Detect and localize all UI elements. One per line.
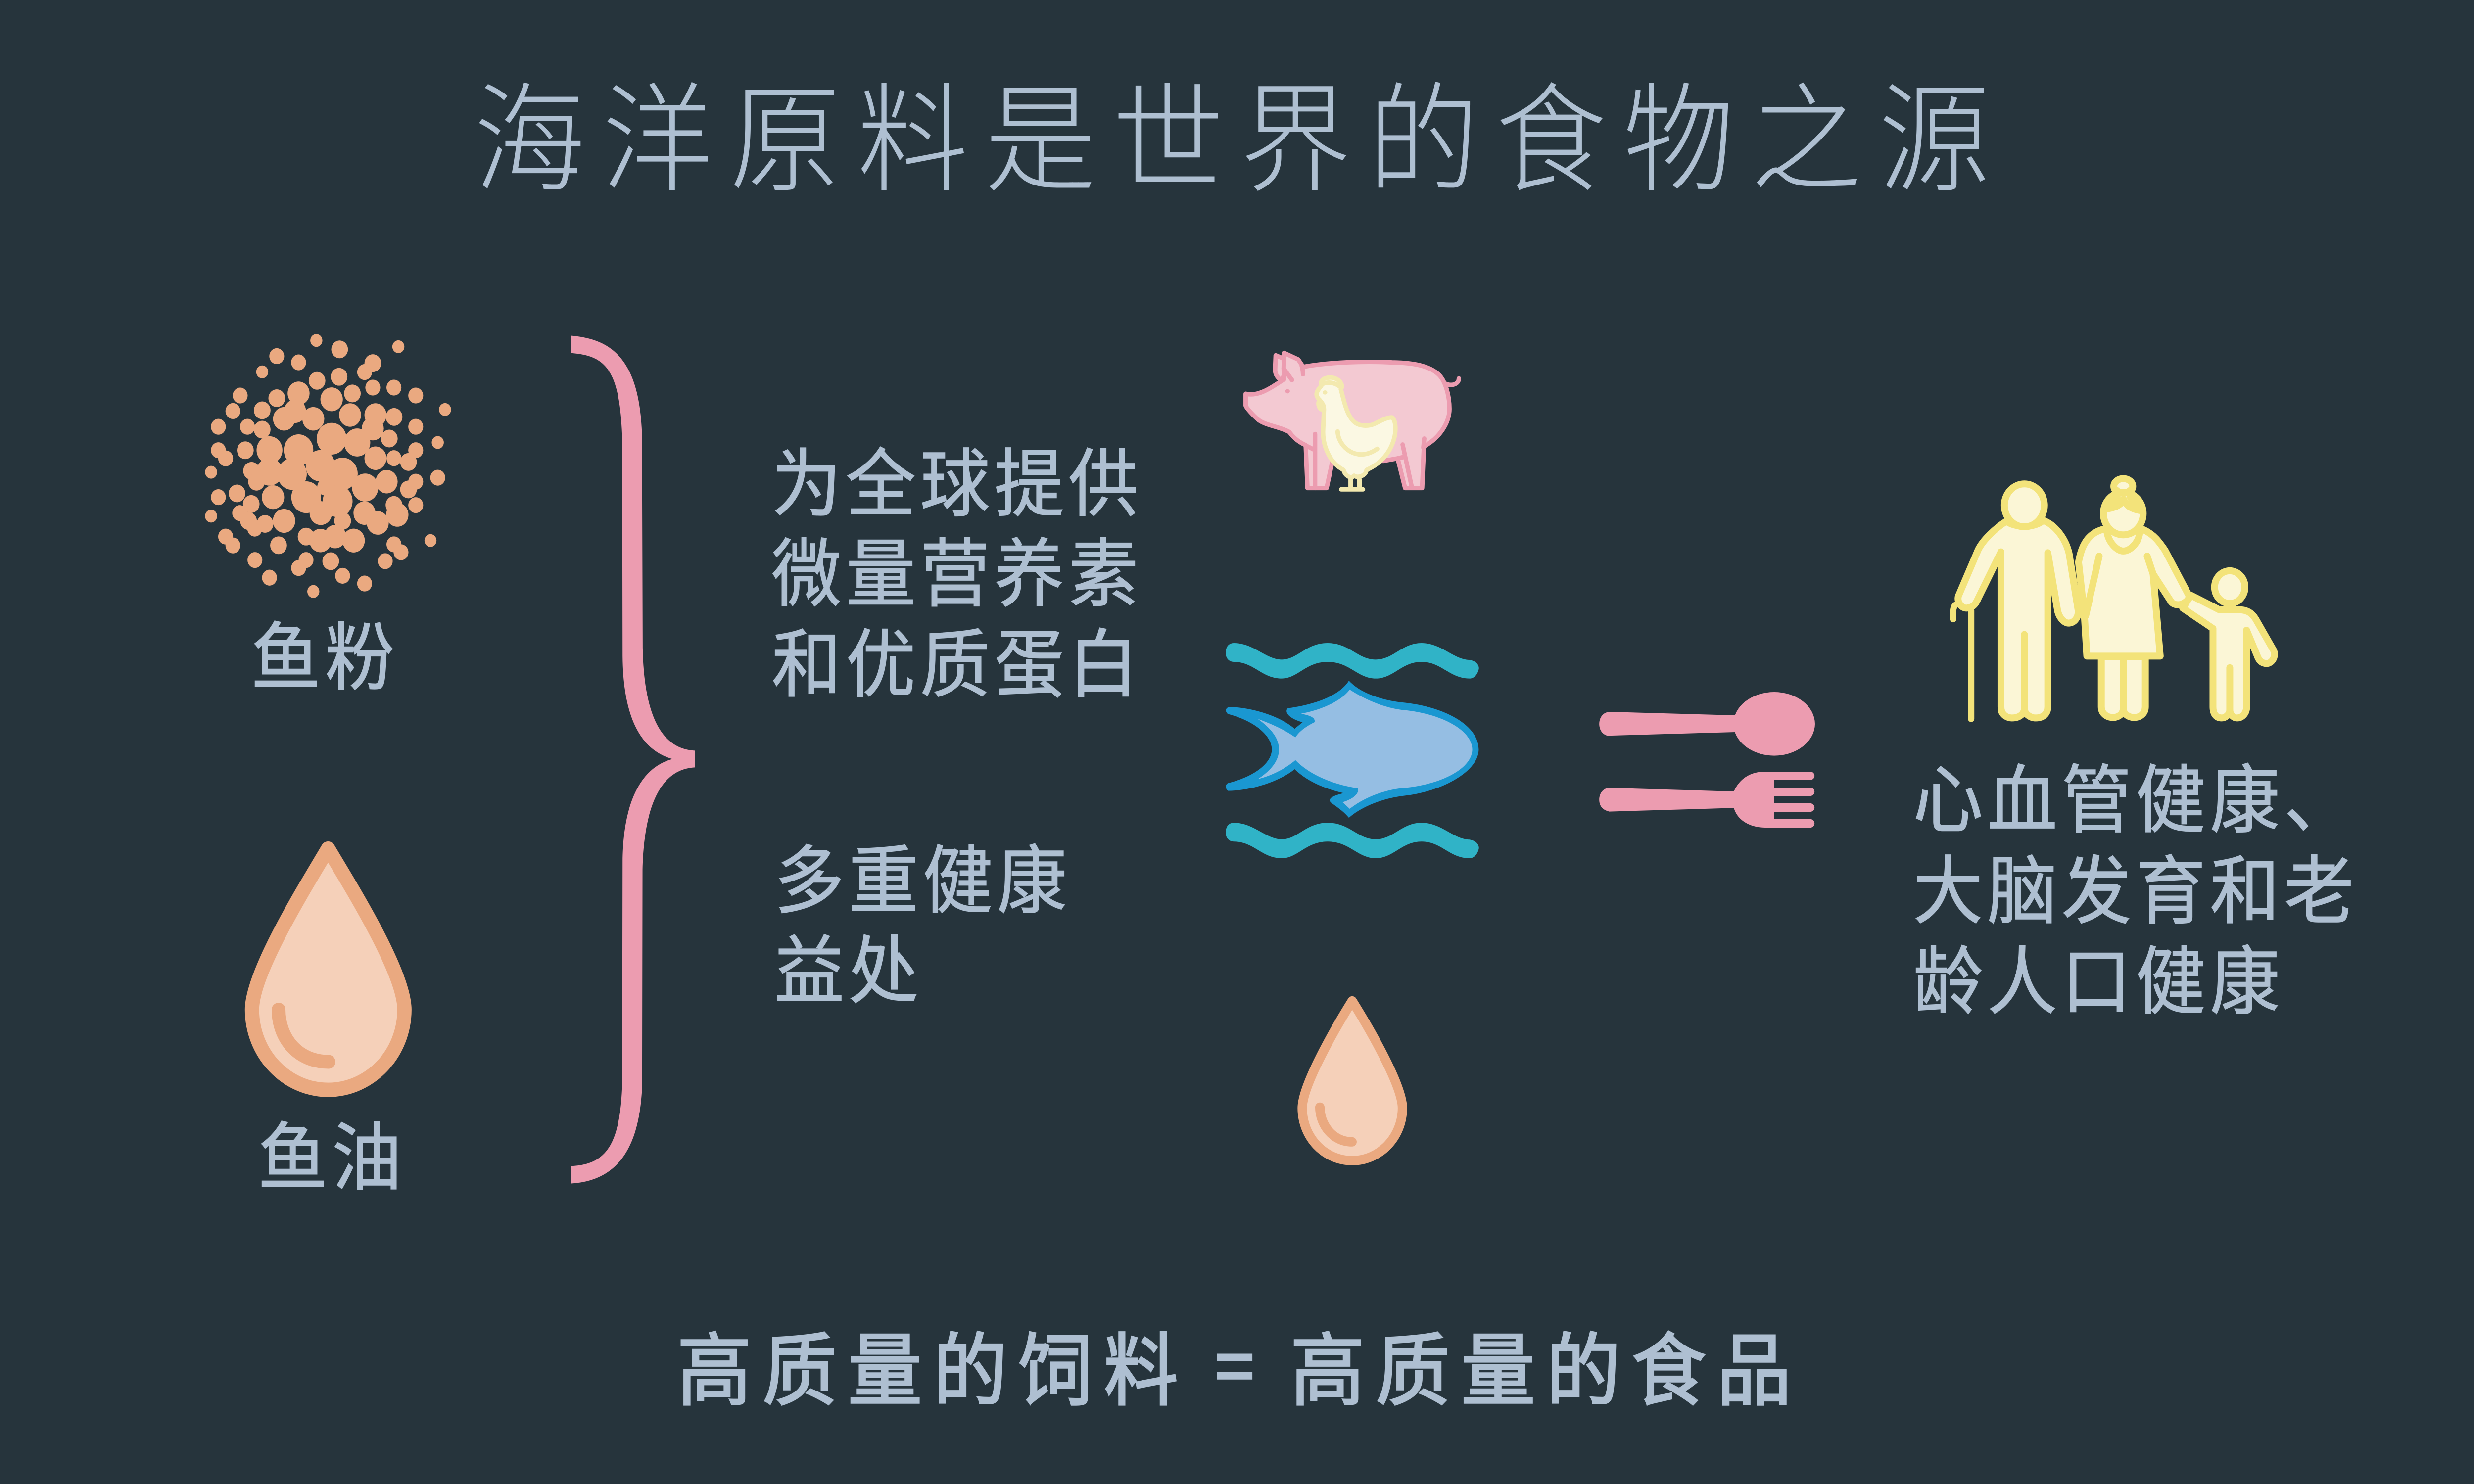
text block: health outcomes: 龄人口健康: [1913, 940, 2284, 1023]
icon: pig and chicken: [1246, 353, 1459, 489]
text block: health benefits: 益处: [774, 929, 923, 1013]
text block: health benefits: [774, 839, 1071, 1013]
icon: fish oil drop: [252, 849, 404, 1090]
wave: top: [1226, 643, 1479, 679]
text block: health benefits: 多重健康: [774, 839, 1071, 923]
title: 海洋原料是世界的食物之源: [474, 74, 2006, 207]
grandfather: [1953, 484, 2078, 719]
brace: [571, 336, 695, 1183]
spoon: [1599, 692, 1815, 756]
icon: small fish oil drop: [1302, 1001, 1402, 1160]
fork: [1599, 772, 1814, 828]
text block: health outcomes: 大脑发育和老: [1913, 850, 2358, 933]
text block: micronutrients and protein: [772, 443, 1143, 706]
icon: family of three generations: [1953, 479, 2275, 719]
footer statement: 高质量的饲料: [677, 1327, 1189, 1415]
icon: fish meal particles: [205, 334, 451, 598]
grandmother: [2079, 479, 2189, 717]
label: fish oil: 鱼油: [258, 1116, 406, 1200]
text block: health outcomes: 心血管健康、: [1913, 759, 2358, 842]
text block: micronutrients and protein: 为全球提供: [772, 443, 1143, 526]
chicken: [1317, 377, 1395, 489]
child: [2183, 571, 2275, 718]
icon: fish between waves: [1226, 643, 1479, 858]
footer statement: =: [1214, 1324, 1255, 1407]
wave: bottom: [1226, 823, 1479, 858]
pig: [1246, 353, 1459, 488]
fish: [1226, 681, 1478, 818]
label: fish meal: 鱼粉: [251, 616, 399, 699]
text block: micronutrients and protein: 和优质蛋白: [772, 623, 1143, 706]
footer statement: 高质量的食品: [1290, 1327, 1803, 1415]
icon: spoon and fork: [1599, 692, 1815, 828]
text block: health outcomes: [1913, 759, 2358, 1023]
text block: micronutrients and protein: 微量营养素: [772, 533, 1143, 616]
